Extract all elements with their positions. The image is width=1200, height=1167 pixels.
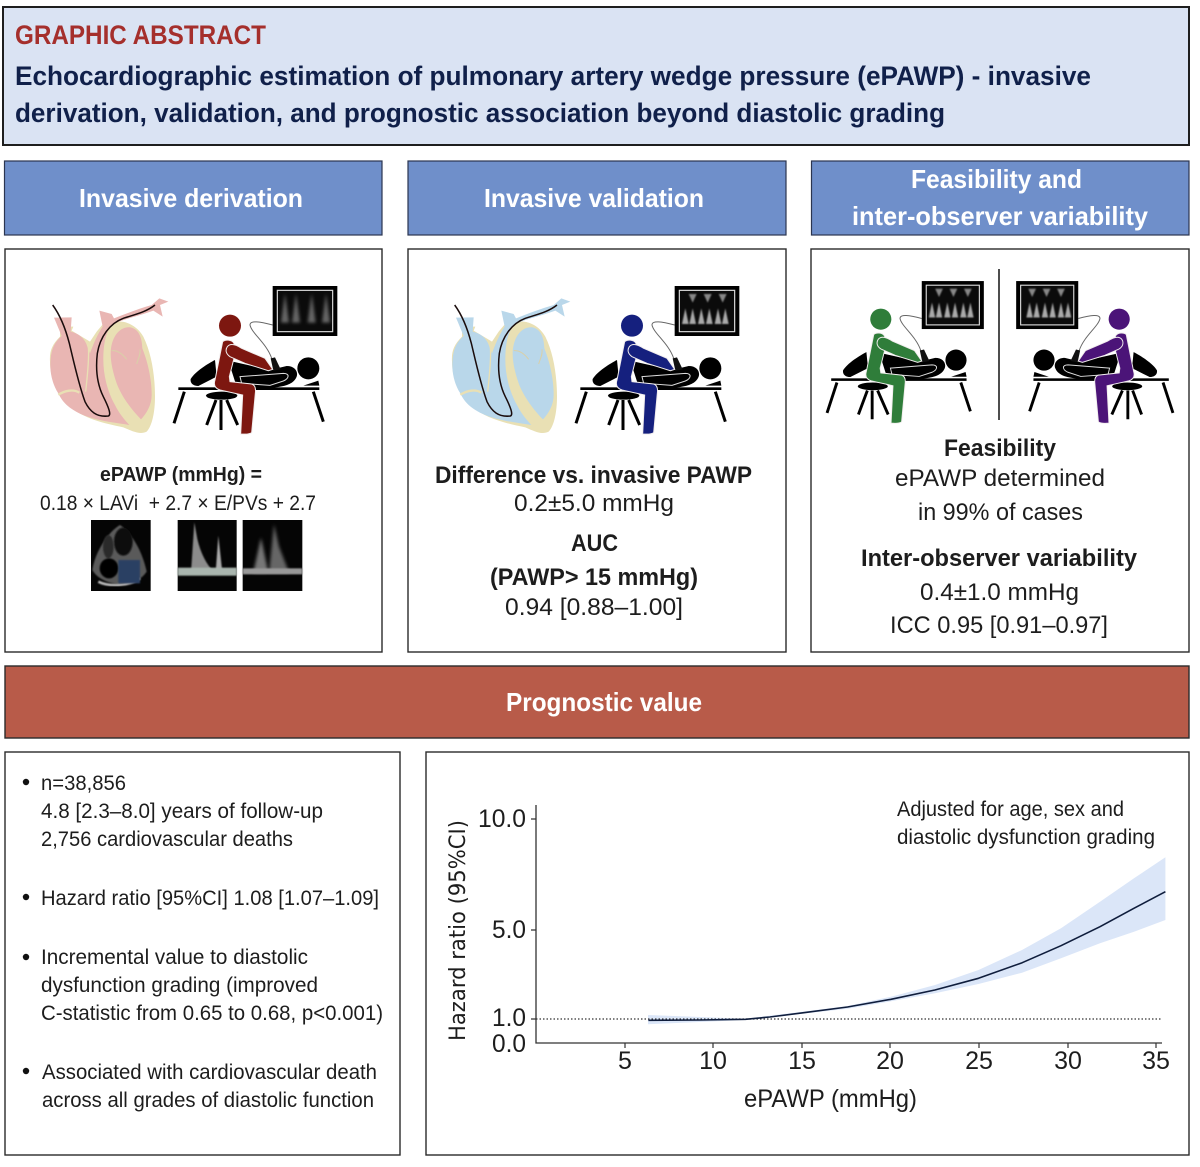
column heading: feasibility: inter-observer variability: [852, 201, 1149, 231]
x axis title: ePAWP (mmHg): [744, 1085, 917, 1113]
x axis labels: 15: [788, 1047, 816, 1075]
icon: heart with catheter (blue): [452, 298, 570, 433]
icon: observer one (green): [827, 281, 984, 423]
formula: ePAWP (mmHg) =: [100, 464, 262, 486]
formula: [40, 464, 316, 515]
formula: 0.18 × LAVi + 2.7 × E/PVs + 2.7: [40, 492, 316, 515]
variability text: [861, 545, 1138, 639]
bullet: incremental value: dysfunction grading (improved: [41, 974, 318, 997]
icon: sonographer with patient (red): [174, 286, 337, 434]
x axis labels: 35: [1142, 1047, 1170, 1075]
validation text: 0.2±5.0 mmHg: [514, 490, 674, 517]
x axis labels: 25: [965, 1047, 993, 1075]
feasibility text: ePAWP determined: [895, 465, 1105, 492]
bullet: association: Associated with cardiovascular death: [42, 1061, 377, 1084]
echo images: [91, 520, 302, 591]
echo image: left atrium: [91, 520, 151, 591]
title: derivation, validation, and prognostic association beyond diastolic grading: [15, 98, 945, 128]
heading: prognostic value: Prognostic value: [506, 687, 702, 717]
column heading: invasive derivation: [4, 161, 382, 235]
column heading: feasibility: Feasibility and: [911, 164, 1082, 194]
validation text: Difference vs. invasive PAWP: [435, 462, 752, 489]
column heading: feasibility: [812, 161, 1189, 235]
y axis labels: 1.0: [492, 1004, 526, 1032]
bullet: cohort: [23, 772, 323, 851]
bullet: association: [23, 1061, 377, 1112]
chart annotation: Adjusted for age, sex and: [897, 798, 1124, 821]
bullet: incremental value: Incremental value to diastolic: [41, 946, 308, 969]
y axis labels: 5.0: [492, 916, 526, 944]
header panel: [3, 7, 1189, 145]
axes: [531, 805, 1162, 1048]
chart annotation: diastolic dysfunction grading: [897, 826, 1155, 849]
feasibility text: [895, 435, 1105, 526]
panel: invasive validation: [408, 249, 786, 652]
feasibility text: in 99% of cases: [918, 499, 1083, 526]
x axis labels: 10: [699, 1047, 727, 1075]
panel: invasive derivation: [5, 249, 382, 652]
variability text: 0.4±1.0 mmHg: [920, 579, 1079, 606]
panel: feasibility and variability: [811, 249, 1189, 652]
bullet: cohort: 4.8 [2.3–8.0] years of follow-up: [41, 800, 323, 823]
y axis labels: 10.0: [478, 805, 526, 833]
y axis labels: [478, 805, 526, 1058]
y axis title: Hazard ratio (95%CI): [446, 820, 471, 1041]
label: graphic abstract: GRAPHIC ABSTRACT: [15, 20, 266, 50]
validation text: 0.94 [0.88–1.00]: [505, 594, 683, 621]
echo image: pulmonary vein flow: [243, 520, 302, 591]
column heading: invasive derivation: Invasive derivation: [79, 183, 303, 213]
validation text: AUC: [571, 530, 618, 557]
heading: prognostic value: [5, 666, 1189, 738]
x axis labels: [618, 1047, 1170, 1075]
chart annotation: [897, 798, 1155, 849]
icon: sonographer with patient (blue): [576, 286, 739, 434]
panel: hazard ratio chart: [426, 752, 1189, 1155]
x axis labels: 5: [618, 1047, 632, 1075]
bullet: cohort: n=38,856: [41, 772, 126, 795]
confidence band: [648, 857, 1165, 1024]
validation text: [435, 462, 752, 621]
icon: observer two (purple): [1016, 281, 1173, 423]
echo image: mitral inflow: [178, 520, 237, 591]
variability text: Inter-observer variability: [861, 545, 1138, 572]
title: [15, 61, 1091, 128]
icon: heart with catheter (red): [50, 298, 168, 433]
bullet: association: across all grades of diastolic function: [42, 1089, 374, 1112]
column heading: invasive validation: Invasive validation: [484, 183, 704, 213]
panel: prognostic bullets: [5, 752, 400, 1155]
bullet: incremental value: C-statistic from 0.65 to 0.68, p<0.001): [41, 1002, 383, 1025]
x axis labels: 20: [876, 1047, 904, 1075]
y axis labels: 0.0: [492, 1030, 526, 1058]
feasibility text: Feasibility: [944, 435, 1057, 462]
bullet: hazard ratio: Hazard ratio [95%CI] 1.08 [1.07–1.09]: [41, 887, 379, 910]
x axis labels: 30: [1054, 1047, 1082, 1075]
column heading: invasive validation: [408, 161, 786, 235]
variability text: ICC 0.95 [0.91–0.97]: [890, 612, 1108, 639]
bullet: cohort: 2,756 cardiovascular deaths: [41, 828, 293, 851]
hazard curve: [648, 892, 1165, 1020]
bullet: incremental value: [23, 946, 383, 1025]
validation text: (PAWP> 15 mmHg): [490, 564, 698, 591]
title: Echocardiographic estimation of pulmonary artery wedge pressure (ePAWP) - invasive: [15, 61, 1091, 91]
